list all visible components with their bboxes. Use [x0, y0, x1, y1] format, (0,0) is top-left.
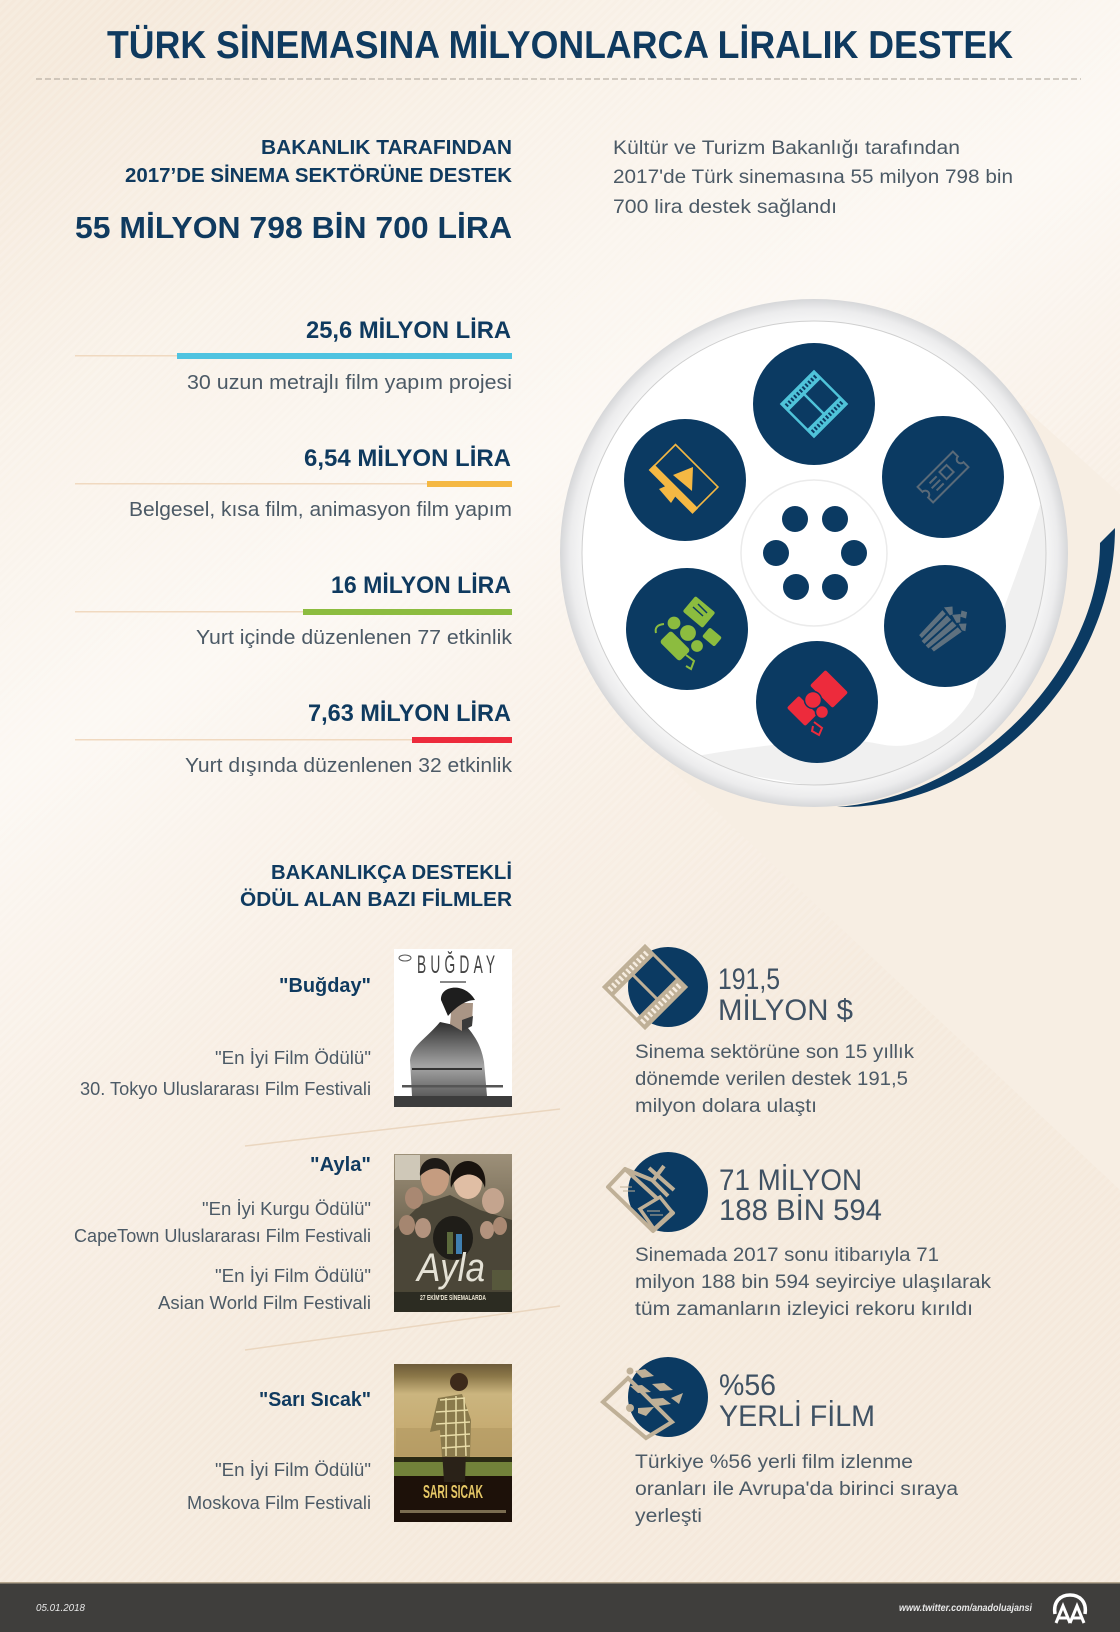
- stat: 71 milyon seyirci: Sinemada 2017 sonu itibarıyla 71: [635, 1245, 939, 1266]
- stat: 191,5 milyon dolar: Sinema sektörüne son 15 yıllık: [635, 1042, 915, 1063]
- panel: total support heading: BAKANLIK TARAFINDAN: [261, 137, 512, 159]
- intro text: Kültür ve Turizm Bakanlığı tarafından: [613, 138, 960, 159]
- item: 25,6 milyon: 25,6 MİLYON LİRA: [306, 317, 511, 344]
- heading: awarded films: [240, 861, 513, 911]
- film: Buğday: [80, 949, 512, 1107]
- film: Sarı Sıcak: "En İyi Film Ödülü": [215, 1460, 371, 1480]
- stat: yüzde 56 yerli film: Türkiye %56 yerli film izlenme: [635, 1452, 913, 1473]
- stat: 191,5 milyon dolar: [603, 945, 915, 1117]
- icon: clapperboard badge: [603, 1357, 708, 1438]
- panel: total support heading: 55 MİLYON 798 BİN 700 LİRA: [75, 210, 512, 245]
- film: Buğday: "En İyi Film Ödülü": [215, 1048, 371, 1068]
- stat: 191,5 milyon dolar: dönemde verilen destek 191,5: [635, 1069, 908, 1090]
- source: www.twitter.com/anadoluajansi: [899, 1603, 1032, 1614]
- film reel illustration: [560, 299, 1115, 830]
- intro text: 2017'de Türk sinemasına 55 milyon 798 bin: [613, 167, 1013, 188]
- icon: tickets badge: [608, 1152, 708, 1232]
- film: Sarı Sıcak: Moskova Film Festivali: [187, 1493, 371, 1513]
- item: 25,6 milyon: [75, 317, 512, 394]
- icon: red audience: [756, 641, 878, 763]
- reel tail: [837, 528, 1115, 807]
- film: Sarı Sıcak: "Sarı Sıcak": [259, 1389, 371, 1411]
- stat: 71 milyon seyirci: [608, 1152, 992, 1320]
- item: 16 milyon: Yurt içinde düzenlenen 77 etkinlik: [196, 627, 513, 649]
- stat: 71 milyon seyirci: 71 MİLYON: [719, 1164, 862, 1197]
- icon: popcorn: [884, 565, 1006, 687]
- poster: Sarı Sıcak: [394, 1364, 512, 1522]
- heading: awarded films: BAKANLIKÇA DESTEKLİ: [271, 861, 512, 884]
- stat: 191,5 milyon dolar: MİLYON $: [718, 994, 853, 1027]
- stat: yüzde 56 yerli film: [603, 1357, 958, 1527]
- panel: total support heading: [75, 137, 513, 245]
- intro text: [613, 138, 1013, 218]
- film: Ayla: "En İyi Film Ödülü": [215, 1266, 371, 1286]
- film: Buğday: "Buğday": [279, 975, 371, 997]
- item: 7,63 milyon: Yurt dışında düzenlenen 32 etkinlik: [185, 755, 513, 777]
- panel: total support heading: 2017’DE SİNEMA SEKTÖRÜNE DESTEK: [125, 164, 513, 187]
- stat: yüzde 56 yerli film: %56: [719, 1369, 776, 1402]
- stat: 191,5 milyon dolar: milyon dolara ulaştı: [635, 1096, 817, 1117]
- poster: Ayla: Ayla: [415, 1246, 485, 1290]
- film: Ayla: CapeTown Uluslararası Film Festivali: [74, 1226, 371, 1246]
- stat: yüzde 56 yerli film: yerleşti: [635, 1506, 702, 1527]
- icon: monitor: [624, 419, 746, 541]
- poster: Buğday: BUĞDAY: [417, 951, 495, 979]
- poster: Ayla: 27 EKİM'DE SİNEMALARDA: [420, 1294, 486, 1302]
- film: Ayla: "En İyi Kurgu Ödülü": [202, 1199, 371, 1219]
- date: 05.01.2018: [36, 1603, 85, 1614]
- item: 16 milyon: [75, 572, 513, 649]
- poster: Sarı Sıcak: SARI SICAK: [423, 1482, 483, 1502]
- item: 16 milyon: 16 MİLYON LİRA: [331, 572, 511, 599]
- film: Ayla: "Ayla": [310, 1154, 371, 1176]
- film: Buğday: 30. Tokyo Uluslararası Film Festivali: [80, 1079, 371, 1099]
- item: 7,63 milyon: 7,63 MİLYON LİRA: [308, 700, 511, 727]
- poster: Buğday: [394, 949, 512, 1107]
- item: 25,6 milyon: 30 uzun metrajlı film yapım projesi: [187, 372, 512, 394]
- film: Ayla: [74, 1154, 512, 1313]
- stat: 191,5 milyon dolar: 191,5: [718, 963, 780, 996]
- intro text: 700 lira destek sağlandı: [613, 197, 837, 218]
- stat: yüzde 56 yerli film: YERLİ FİLM: [719, 1400, 875, 1433]
- panel: support breakdown: [75, 317, 513, 777]
- stat: 71 milyon seyirci: 188 BİN 594: [719, 1194, 882, 1227]
- stat: 71 milyon seyirci: tüm zamanların izleyici rekoru kırıldı: [635, 1299, 973, 1320]
- item: 6,54 milyon: 6,54 MİLYON LİRA: [304, 445, 511, 472]
- stat: yüzde 56 yerli film: oranları ile Avrupa'da birinci sıraya: [635, 1479, 958, 1500]
- poster: Ayla: [394, 1154, 512, 1312]
- item: 6,54 milyon: [75, 445, 512, 521]
- icon: AA logo: [1055, 1595, 1085, 1623]
- item: 7,63 milyon: [75, 700, 513, 777]
- film: Sarı Sıcak: [187, 1364, 512, 1522]
- item: 6,54 milyon: Belgesel, kısa film, animasyon film yapım: [129, 499, 512, 521]
- film: Ayla: Asian World Film Festivali: [158, 1293, 371, 1313]
- stat: 71 milyon seyirci: milyon 188 bin 594 seyirciye ulaşılarak: [635, 1272, 992, 1293]
- icon: green audience: [626, 568, 748, 690]
- heading: awarded films: ÖDÜL ALAN BAZI FİLMLER: [240, 888, 513, 911]
- icon: film strip badge: [603, 945, 708, 1029]
- hub holes: [763, 506, 867, 600]
- title: TÜRK SİNEMASINA MİLYONLARCA LİRALIK DESTEK: [107, 24, 1013, 67]
- footer: [0, 1582, 1120, 1632]
- icon: film strip: [753, 343, 875, 465]
- reel shadow: [669, 405, 1120, 1190]
- icon: ticket: [882, 416, 1004, 538]
